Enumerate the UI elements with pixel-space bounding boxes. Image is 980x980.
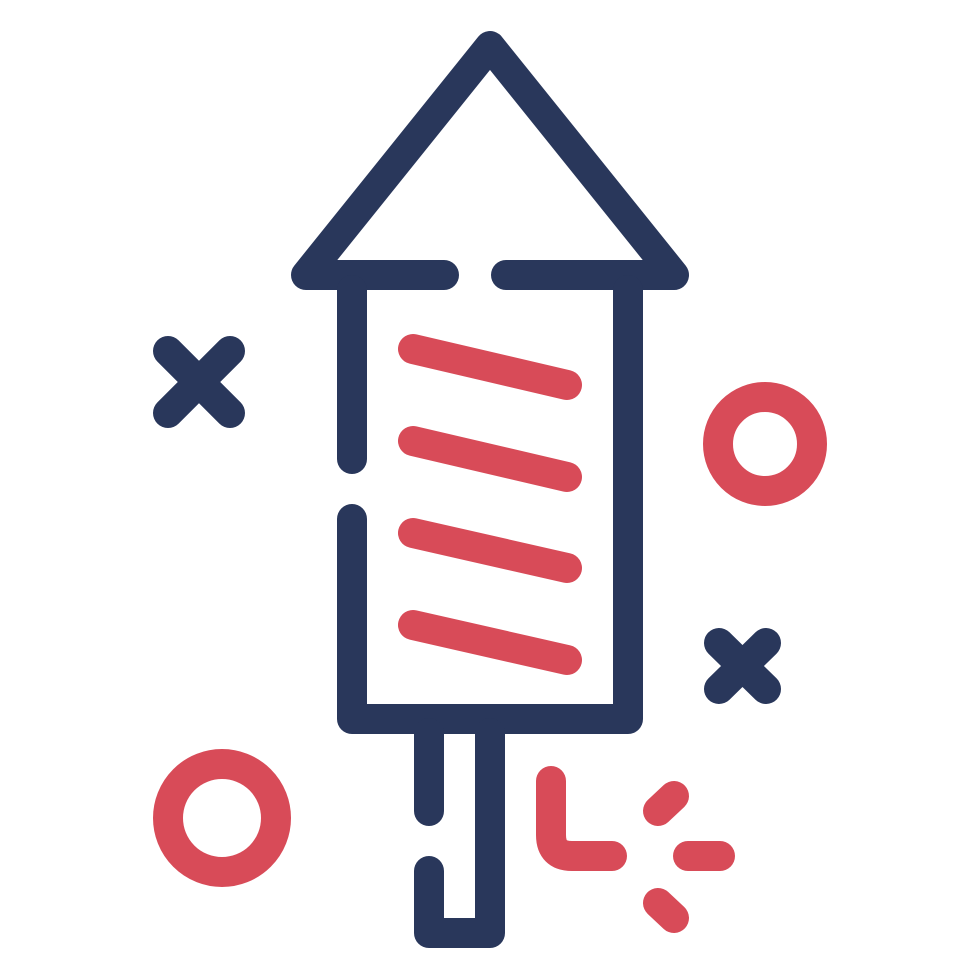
- red ring right: [718, 397, 812, 491]
- red ring bottom left: [168, 764, 276, 872]
- navy cross left: [168, 351, 230, 413]
- navy cross right: [719, 643, 766, 689]
- red spark trail: [551, 781, 612, 856]
- red sparks: [658, 796, 720, 918]
- rocket body: [352, 290, 628, 719]
- rocket stick: [429, 733, 490, 933]
- rocket nose cone: [306, 46, 674, 275]
- body stripes: [413, 349, 567, 660]
